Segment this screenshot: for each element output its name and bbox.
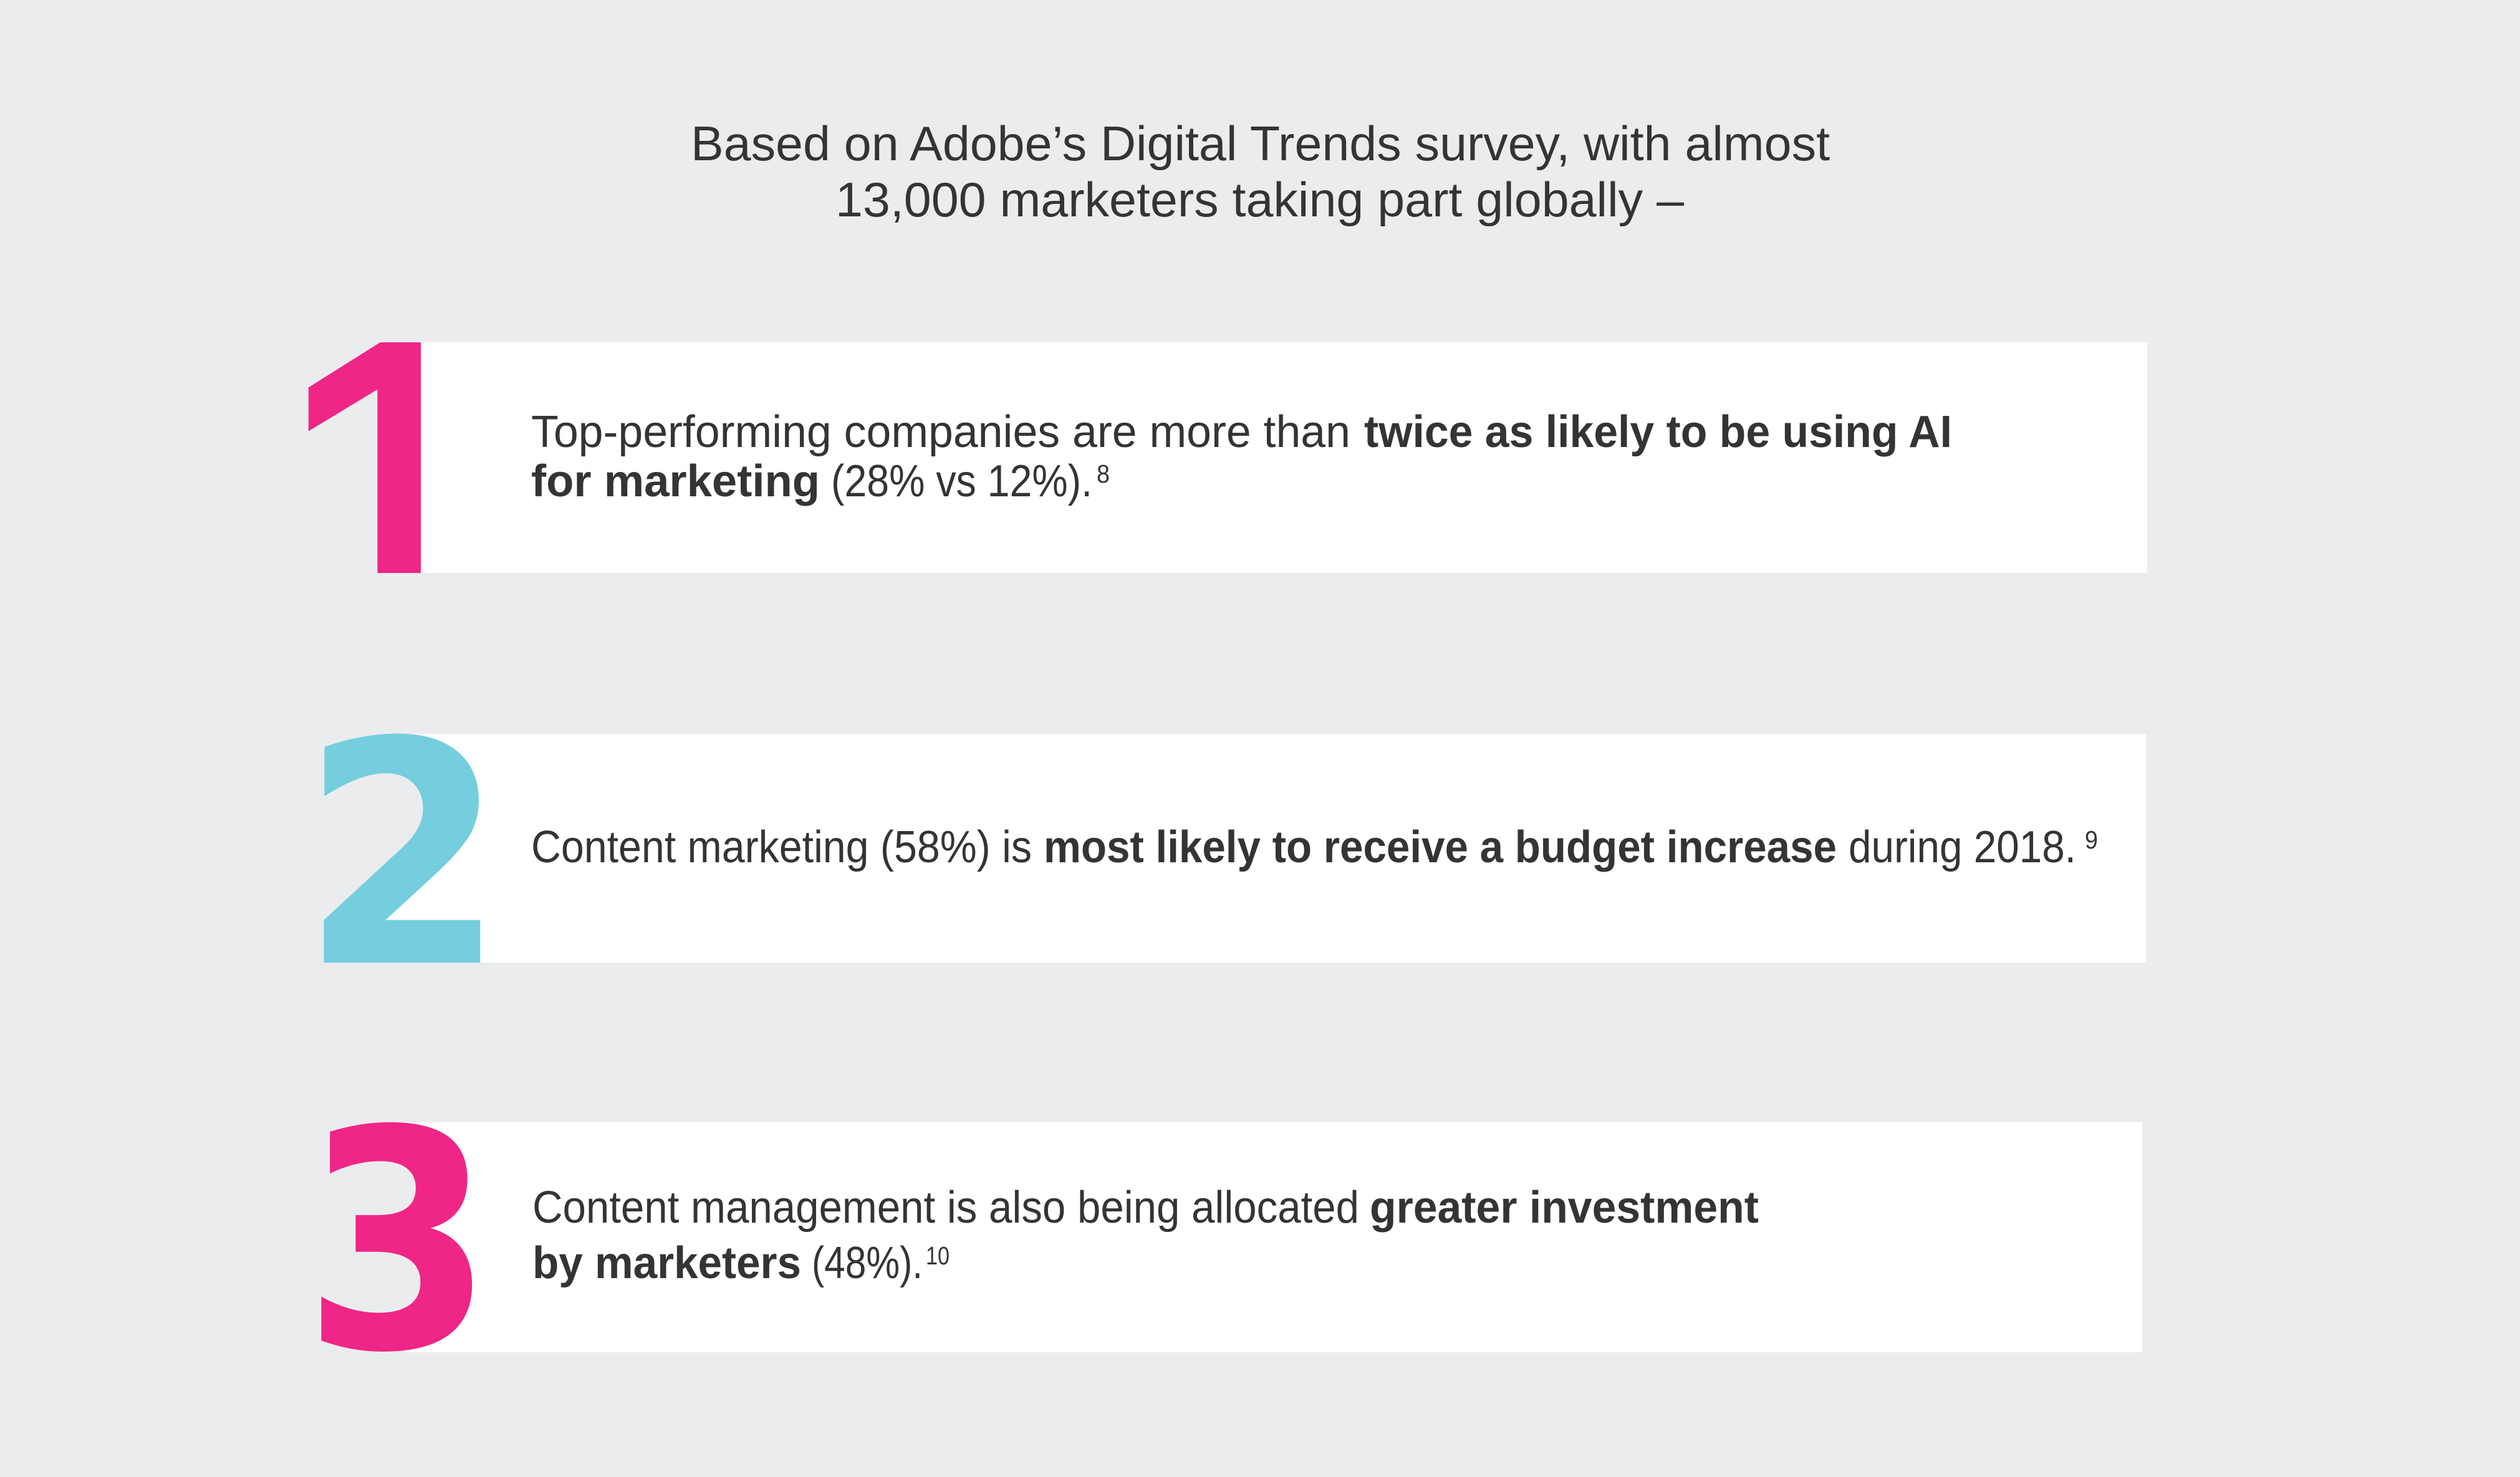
item 1 text: (28% vs 12%). bbox=[831, 456, 1092, 506]
panel: item 3 bbox=[303, 1066, 2142, 1419]
numeral 1: 1 bbox=[280, 254, 512, 707]
panel 2 background bbox=[368, 734, 2146, 963]
item 2 text bbox=[531, 822, 2098, 872]
item 1 text bbox=[531, 407, 1952, 506]
panel: item 1 bbox=[308, 342, 2147, 573]
item 3 text: 10 bbox=[926, 1241, 950, 1270]
item 1 text: for marketing bbox=[531, 456, 820, 506]
item 3 text: by marketers bbox=[532, 1238, 801, 1288]
item 3 text: (48%). bbox=[812, 1238, 923, 1288]
item 3 text bbox=[532, 1183, 1759, 1288]
item 1 text: 8 bbox=[1097, 459, 1110, 488]
item 2 text: 9 bbox=[2085, 825, 2098, 854]
item 1 text: twice as likely to be using AI bbox=[1364, 407, 1952, 457]
title: Based on Adobe’s Digital Trends survey, with almost bbox=[691, 116, 1830, 171]
panel: item 2 bbox=[301, 676, 2146, 1036]
item 1 text: Top-performing companies are more than bbox=[531, 407, 1350, 457]
panel 1 background bbox=[421, 342, 2147, 573]
title: 13,000 marketers taking part globally – bbox=[835, 172, 1685, 227]
numeral 2: 2 bbox=[301, 676, 506, 1036]
numeral 3: 3 bbox=[303, 1066, 494, 1419]
title bbox=[691, 116, 1830, 227]
item 2 text: Content marketing (58%) is bbox=[531, 822, 1032, 872]
item 2 text: during 2018. bbox=[1849, 822, 2076, 872]
panel 3 background bbox=[399, 1122, 2142, 1352]
item 3 text: greater investment bbox=[1370, 1183, 1759, 1233]
item 2 text: most likely to receive a budget increase bbox=[1044, 822, 1837, 872]
item 3 text: Content management is also being allocated bbox=[532, 1183, 1359, 1233]
